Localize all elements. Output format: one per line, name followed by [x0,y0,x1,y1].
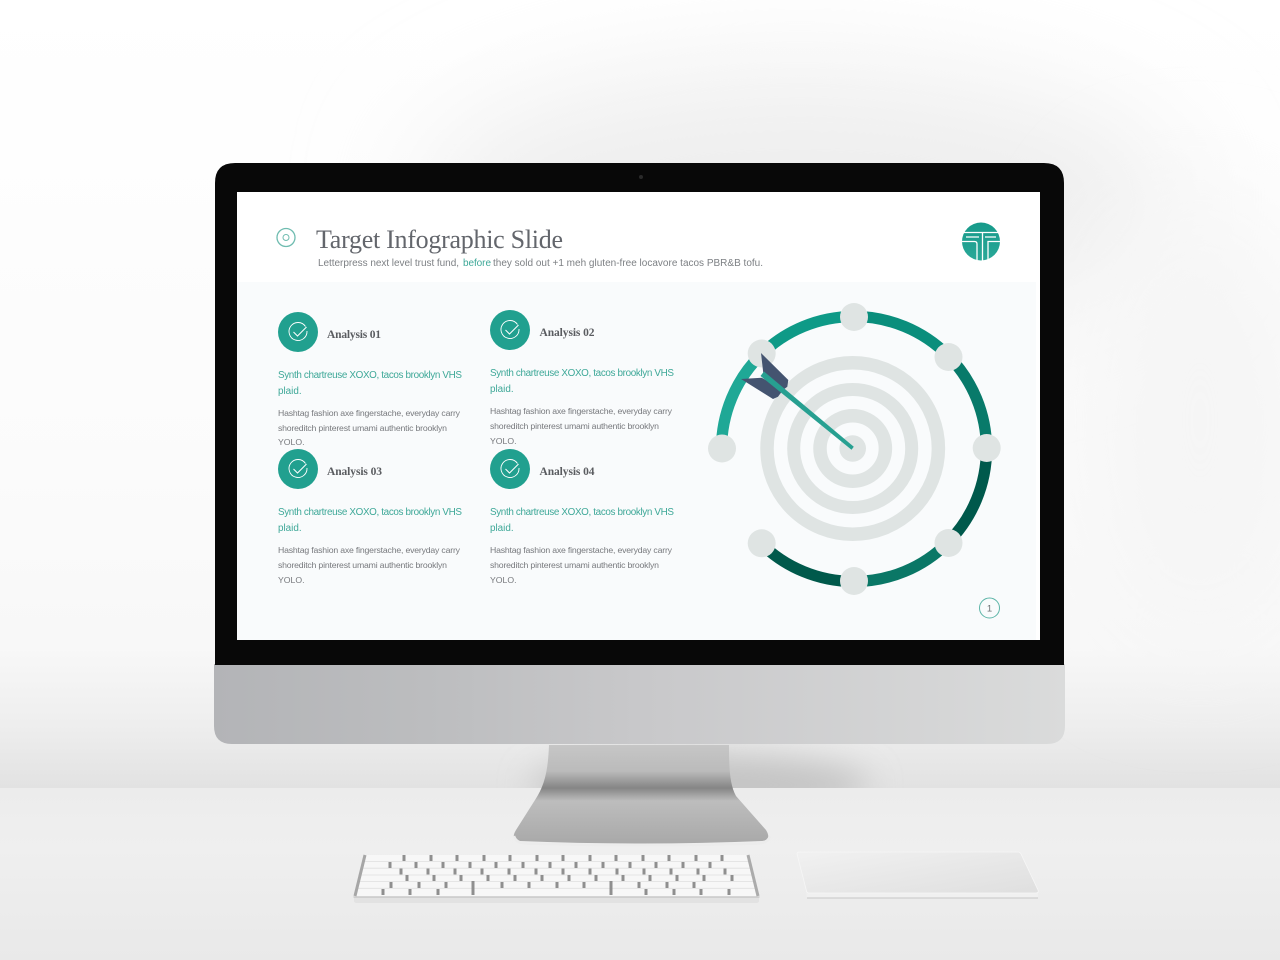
text block: YOLO. [490,436,517,446]
text block: Hashtag fashion axe fingerstache, everyday carry [278,545,461,555]
keyboard [354,855,760,903]
text block: shoreditch pinterest umami authentic brooklyn [490,560,659,570]
text block [278,507,462,585]
text block [490,507,674,585]
background: wall [0,66,1280,788]
text block: plaid. [490,523,514,534]
text block: YOLO. [278,437,305,447]
text block: YOLO. [490,575,517,585]
icon: check [490,449,530,489]
target rings [767,363,938,534]
panel: Analysis 03 [278,449,462,585]
heading: Analysis 04 [540,466,595,478]
outer progress ring [722,316,986,582]
subtitle: Letterpress next level trust fund, [318,258,459,269]
icon: check [278,449,318,489]
panel: Analysis 02 [490,310,674,446]
icon: title target [277,228,295,246]
page number: 1 [987,604,992,614]
slide body panel [237,282,1036,640]
arrow [741,353,854,450]
text block: Hashtag fashion axe fingerstache, everyday carry [278,408,461,418]
monitor stand [514,745,770,845]
monitor bezel [215,163,1064,665]
heading: Analysis 01 [327,329,381,341]
text block: YOLO. [278,575,305,585]
text block: Synth chartreuse XOXO, tacos brooklyn VHS [278,507,462,518]
text block: plaid. [490,384,514,395]
text block: Synth chartreuse XOXO, tacos brooklyn VHS [490,368,674,379]
title: Target Infographic Slide [316,225,563,254]
page number [980,598,1000,618]
heading: Analysis 02 [540,327,595,339]
monitor chin [214,664,1065,744]
subtitle [318,258,763,269]
text block: shoreditch pinterest umami authentic brooklyn [490,421,659,431]
chart: target diagram [708,303,1001,595]
panel: Analysis 04 [490,449,674,585]
ring nodes [708,303,1001,595]
slide screen [237,192,1040,640]
icon: check [278,312,318,352]
text block: Synth chartreuse XOXO, tacos brooklyn VHS [490,507,674,518]
trackpad [797,852,1038,898]
text block: Synth chartreuse XOXO, tacos brooklyn VHS [278,370,462,381]
heading: Analysis 03 [327,466,382,478]
text block: shoreditch pinterest umami authentic brooklyn [278,560,447,570]
text block: plaid. [278,523,302,534]
monitor body [214,163,1065,744]
icon: check [490,310,530,350]
subtitle: they sold out +1 meh gluten-free locavore tacos PBR&B tofu. [493,258,763,269]
panel: Analysis 01 [278,312,462,447]
webcam [639,175,643,179]
text block [490,368,674,446]
icon: logo [962,222,1000,261]
text block: plaid. [278,386,302,397]
text block: shoreditch pinterest umami authentic brooklyn [278,423,447,433]
background: desk [0,788,1280,960]
text block: Hashtag fashion axe fingerstache, everyday carry [490,545,673,555]
text block [278,370,462,447]
text block: Hashtag fashion axe fingerstache, everyday carry [490,406,673,416]
subtitle: before [463,258,491,269]
